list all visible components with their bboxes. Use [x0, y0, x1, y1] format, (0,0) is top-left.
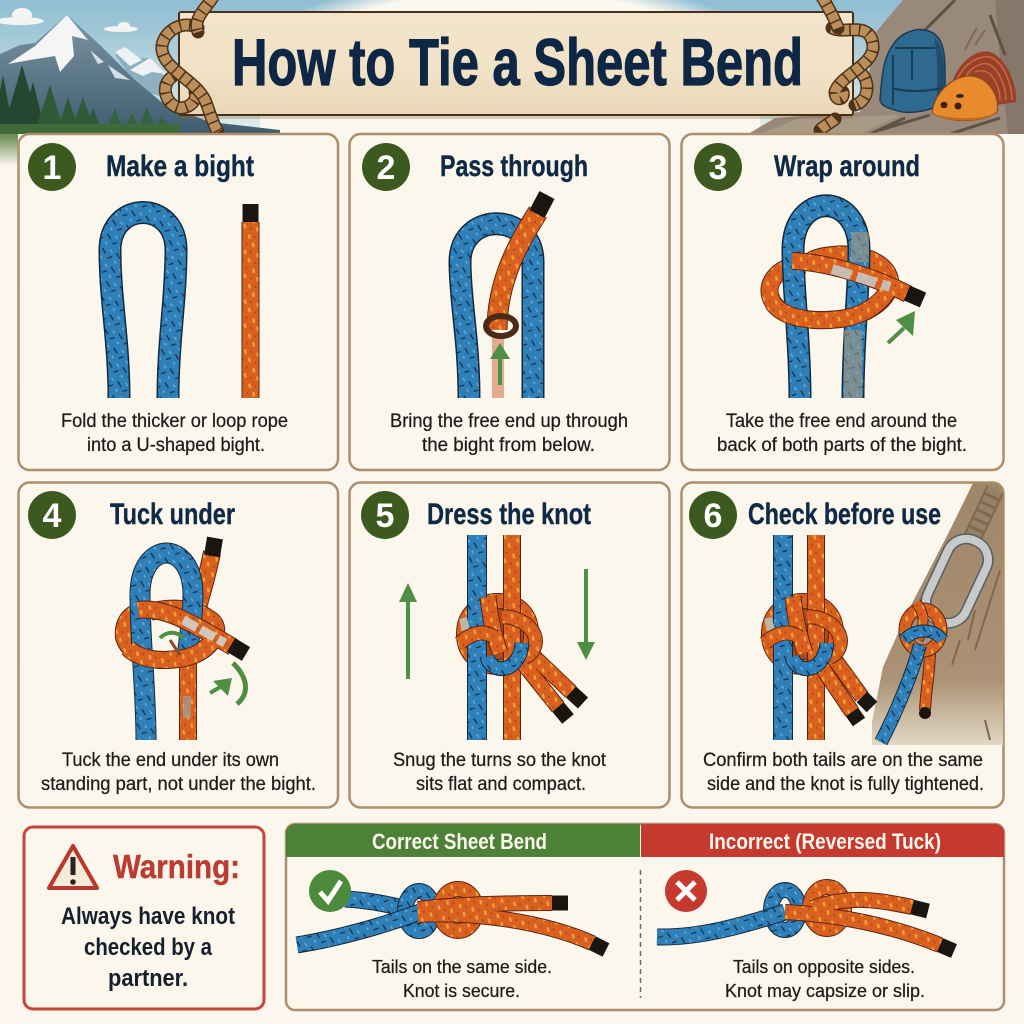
step 5 description: sits flat and compact. — [416, 774, 586, 795]
step number 1: 1 — [43, 149, 61, 187]
step 5 description — [393, 750, 607, 795]
illustration: rope coil — [950, 28, 1016, 107]
panel: step 4 — [18, 482, 338, 808]
step number 4 — [28, 491, 76, 539]
icon: cross mark — [665, 870, 707, 912]
step 6 description: side and the knot is fully tightened. — [707, 774, 984, 795]
illustration: anchored knot — [881, 603, 942, 742]
arrow: pull down — [577, 569, 595, 660]
illustration: incorrect knot — [657, 887, 954, 951]
step 5 description: Snug the turns so the knot — [393, 750, 607, 771]
step number 5 — [361, 491, 409, 539]
illustration: blue rope bight and red rope — [110, 204, 250, 398]
step number 3: 3 — [709, 149, 727, 187]
step 4 description: Tuck the end under its own — [62, 750, 279, 771]
illustration: free end wrapped around bight — [769, 206, 923, 398]
illustration: rock face — [748, 0, 1024, 134]
correct caption — [372, 957, 552, 1001]
panel: warning — [24, 827, 264, 1009]
step number 6 — [689, 491, 737, 539]
step 4 description — [41, 750, 316, 795]
panel: step 3 — [682, 134, 1004, 470]
header: correct — [286, 824, 640, 857]
warning message — [61, 903, 235, 992]
step number 2: 2 — [377, 149, 395, 187]
heading: tuck under: Tuck under — [110, 498, 235, 531]
header: correct: Correct Sheet Bend — [372, 829, 547, 854]
illustration: clouds — [0, 8, 138, 32]
panel: step 1 — [18, 134, 338, 470]
step number 1 — [28, 143, 76, 191]
arrow: pull up — [399, 583, 417, 679]
step number 3 — [694, 143, 742, 191]
icon: warning triangle — [49, 846, 97, 888]
heading: wrap around: Wrap around — [774, 150, 920, 183]
header scenery — [0, 0, 1024, 166]
title banner — [179, 12, 853, 119]
arrows: tuck direction — [160, 633, 246, 704]
step 6 description: Confirm both tails are on the same — [703, 750, 983, 771]
illustration: rock face with anchor — [872, 483, 1003, 745]
correct caption: Knot is secure. — [403, 981, 520, 1001]
illustration: correct knot — [297, 889, 606, 950]
illustration: backpack — [880, 30, 945, 112]
step 1 description: Fold the thicker or loop rope — [61, 411, 288, 432]
warning message: partner. — [108, 965, 188, 992]
step 6 description — [703, 750, 984, 795]
illustration: finished knot — [765, 535, 872, 740]
step 3 description: back of both parts of the bight. — [717, 435, 967, 456]
illustration: tuck under standing part — [124, 538, 246, 740]
warning message: Always have knot — [61, 903, 235, 930]
illustration: mountains and forest — [0, 15, 280, 166]
warning heading: Warning: — [113, 848, 240, 885]
step 4 description: standing part, not under the bight. — [41, 774, 316, 795]
step 2 description: the bight from below. — [422, 435, 595, 456]
panel: step 5 — [350, 482, 670, 808]
panel: step 2 — [350, 134, 670, 470]
incorrect caption — [725, 957, 925, 1001]
arrow: up through bight — [490, 343, 510, 385]
step number 6: 6 — [704, 497, 722, 535]
rope decorations on sign — [162, 0, 873, 132]
illustration: climbing helmet — [932, 76, 997, 120]
step number 4: 4 — [43, 497, 62, 535]
correct caption: Tails on the same side. — [372, 957, 552, 977]
title: How to Tie a Sheet Bend — [232, 25, 803, 99]
step number 2 — [362, 143, 410, 191]
step 1 description: into a U-shaped bight. — [87, 435, 265, 456]
illustration: free end passing through bight — [460, 195, 547, 398]
arrow: wrap direction — [888, 311, 915, 343]
step 2 description: Bring the free end up through — [390, 411, 628, 432]
heading: dress the knot: Dress the knot — [427, 498, 591, 531]
icon: check mark — [309, 870, 351, 912]
panel: comparison — [286, 824, 1004, 1010]
step number 5: 5 — [376, 497, 394, 535]
header: incorrect: Incorrect (Reversed Tuck) — [709, 829, 941, 854]
incorrect caption: Tails on opposite sides. — [733, 957, 915, 977]
step 3 description: Take the free end around the — [726, 411, 957, 432]
step 1 description — [61, 411, 288, 456]
step 3 description — [717, 411, 967, 456]
panel: step 6 — [682, 482, 1004, 808]
heading: make a bight: Make a bight — [106, 150, 254, 183]
illustration: carabiner — [919, 532, 995, 630]
warning message: checked by a — [84, 934, 213, 961]
step 2 description — [390, 411, 628, 456]
heading: pass through: Pass through — [440, 150, 588, 183]
header: incorrect — [641, 824, 1004, 857]
illustration: dressed knot — [460, 535, 583, 740]
heading: check before use: Check before use — [748, 498, 941, 531]
incorrect caption: Knot may capsize or slip. — [725, 981, 925, 1001]
